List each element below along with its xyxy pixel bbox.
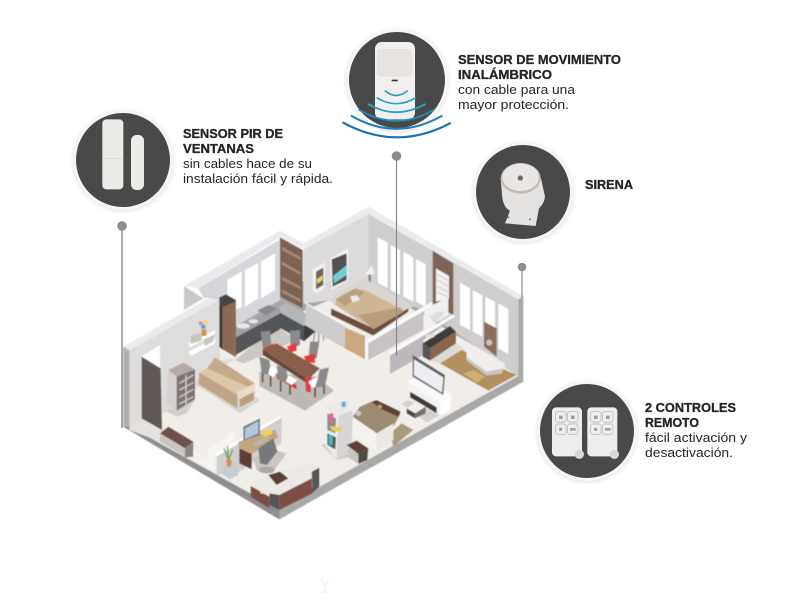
kitchen shelving [280,237,303,308]
icon: motion sensor badge [343,29,450,137]
heading: window sensor: SENSOR PIR DE [183,127,283,141]
side table [347,441,368,464]
office partition [207,416,282,475]
tall kitchen cabinet [219,294,236,357]
icon: remote controls badge [536,381,638,483]
house right half [303,207,523,464]
kitchen counters [235,303,316,363]
heading: remote controls: REMOTO [645,416,699,430]
heading: remote controls [645,401,748,460]
lower partition wall [389,314,455,374]
house left half [123,231,523,519]
wall shelves with plant [188,320,215,356]
pointer: window sensor [117,221,127,428]
left wall [123,297,235,442]
floor slab [123,267,523,519]
bathtub [467,345,505,376]
bedroom and bath back walls [303,207,523,380]
bedroom windows [378,237,426,307]
bedroom entrance floor [345,327,365,359]
bath windows [460,283,508,354]
living room sofa [353,400,413,452]
bath vanity [423,326,465,363]
heading: window sensor: instalación fácil y rápida. [183,172,333,186]
wardrobe panel [433,251,453,315]
dining rug [259,372,334,411]
pointer: motion sensor [392,151,401,356]
heading: remote controls: fácil activación y [645,431,748,445]
heading: motion sensor: SENSOR DE MOVIMIENTO [458,53,621,67]
bedroom front wall with glass [365,297,448,361]
sofa [196,357,260,413]
heading: motion sensor: con cable para una [458,83,575,97]
partition wall left of bed [304,302,345,348]
isometric house illustration [123,207,523,519]
bed [328,278,413,336]
office desk and computer [238,418,287,473]
heading: siren: SIRENA [585,178,633,192]
icon: window sensor badge [72,110,174,212]
bath rug [440,350,517,391]
front door [142,345,162,430]
heading: motion sensor: INALÁMBRICO [458,67,552,82]
dining table and chairs [259,330,329,397]
ottoman [407,402,426,418]
faint watermark mark [321,579,329,592]
brown door panel with tap [484,322,497,357]
pointer: siren [518,263,526,298]
heading: remote controls: 2 CONTROLES [645,401,736,415]
left bookcase cabinet [165,363,195,417]
heading: window sensor: VENTANAS [183,142,254,156]
wall art [313,248,348,294]
heading: window sensor [183,127,333,186]
heading: window sensor: sin cables hace de su [183,157,312,171]
bar stool [313,322,324,343]
kitchen back wall [184,231,303,327]
heading: motion sensor: mayor protección. [458,98,569,112]
heading: remote controls: desactivación. [645,446,733,460]
TV stand [402,377,452,423]
heading: motion sensor [458,53,621,112]
potted plant [222,446,238,479]
reception counter [251,462,319,510]
living room bookcase [322,400,353,460]
television [413,355,445,395]
table lamp [365,265,378,290]
bench by the front door [160,427,217,472]
icon: siren badge [472,142,574,244]
